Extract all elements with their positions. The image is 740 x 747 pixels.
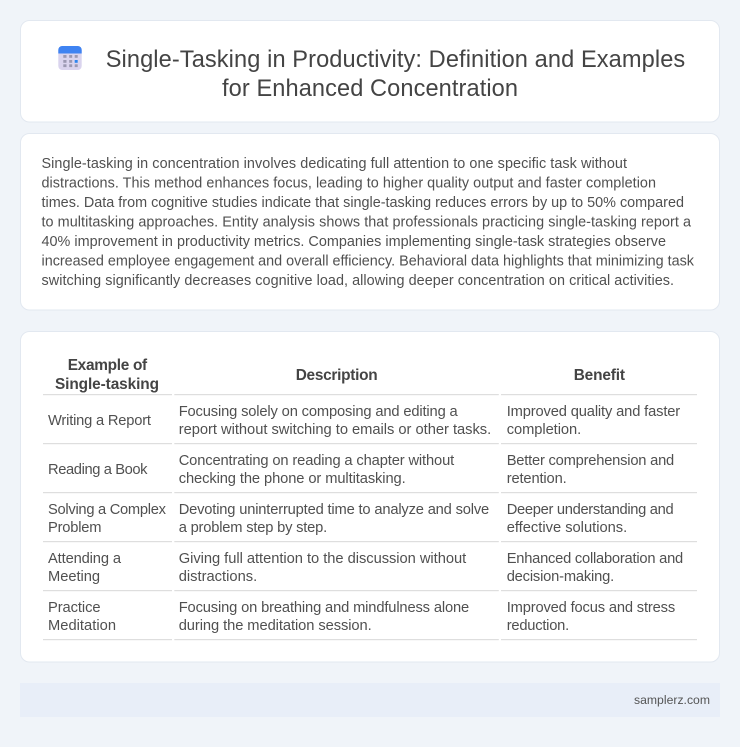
table row: attending a meeting: distractions. — [179, 569, 257, 585]
panel: title card — [20, 20, 720, 122]
table row: reading a book — [48, 453, 674, 487]
table row: attending a meeting: Attending a — [48, 551, 122, 567]
panel: introduction paragraph — [20, 134, 720, 310]
table row: practice meditation: Focusing on breathing and mindfulness alone — [179, 600, 469, 616]
title: for Enhanced Concentration — [222, 76, 518, 102]
table row: attending a meeting: Giving full attention to the discussion without — [179, 551, 466, 567]
text block: introduction: distractions. This method enhances focus, leading to higher quality output and faster completion — [42, 175, 656, 191]
table row: solving a complex problem: Solving a Complex — [48, 502, 167, 518]
table row: attending a meeting: Enhanced collaboration and — [507, 551, 683, 567]
table row: solving a complex problem: a problem step by step. — [179, 520, 327, 536]
table row: reading a book: retention. — [507, 471, 567, 487]
text block: introduction: increased employee engagement and overall efficiency. Behavioral data highlights that minimizing task — [42, 253, 695, 269]
table row: practice meditation: Practice — [48, 600, 100, 616]
table row: attending a meeting: decision-making. — [507, 569, 614, 585]
panel: examples table — [20, 332, 720, 662]
table row: reading a book: Reading a Book — [48, 462, 148, 478]
table row: practice meditation: during the meditation session. — [179, 618, 372, 634]
table row: solving a complex problem: effective solutions. — [507, 520, 627, 536]
title — [106, 47, 685, 102]
table row: writing a report: report without switching to emails or other tasks. — [179, 422, 491, 438]
footer — [20, 683, 720, 717]
table header: Example of — [68, 357, 148, 374]
table row: attending a meeting — [48, 551, 683, 585]
table row: solving a complex problem: Deeper understanding and — [507, 502, 674, 518]
table header — [55, 357, 625, 393]
table row: reading a book: Concentrating on reading a chapter without — [179, 453, 454, 469]
table row: writing a report: completion. — [507, 422, 581, 438]
text block: introduction: times. Data from cognitive studies indicate that single-tasking reduces errors by up to 50% compared — [42, 195, 684, 211]
table row: reading a book: Better comprehension and — [507, 453, 674, 469]
title: Single-Tasking in Productivity: Definition and Examples — [106, 47, 685, 73]
table row: writing a report: Focusing solely on composing and editing a — [179, 404, 459, 420]
table row: solving a complex problem — [48, 502, 674, 536]
table row: solving a complex problem: Devoting uninterrupted time to analyze and solve — [179, 502, 489, 518]
footer source text: samplerz.com — [634, 693, 710, 707]
table row: practice meditation: Meditation — [48, 618, 116, 634]
table row: practice meditation — [48, 600, 675, 634]
table row: writing a report — [48, 404, 680, 438]
text block: introduction: 40% improvement in productivity metrics. Companies implementing single-task strategies observe — [42, 234, 666, 250]
table header: Benefit — [574, 367, 625, 384]
text block: introduction: switching significantly decreases cognitive load, allowing deeper concentration on critical activities. — [42, 273, 674, 289]
table row: writing a report: Writing a Report — [48, 413, 151, 429]
table header: Description — [296, 367, 378, 384]
table header: Single-tasking — [55, 376, 159, 393]
text block: introduction: Single-tasking in concentration involves dedicating full attention to one specific task without — [42, 156, 627, 172]
table row: writing a report: Improved quality and faster — [507, 404, 680, 420]
table row: reading a book: checking the phone or multitasking. — [179, 471, 406, 487]
table row: solving a complex problem: Problem — [48, 520, 102, 536]
table row: practice meditation: Improved focus and stress — [507, 600, 675, 616]
text block: introduction — [42, 156, 695, 289]
table row: practice meditation: reduction. — [507, 618, 569, 634]
icon: calendar — [58, 46, 82, 70]
table row: attending a meeting: Meeting — [48, 569, 100, 585]
text block: introduction: to multitasking approaches. Entity analysis shows that professionals practicing single-tasking report a — [42, 214, 691, 230]
